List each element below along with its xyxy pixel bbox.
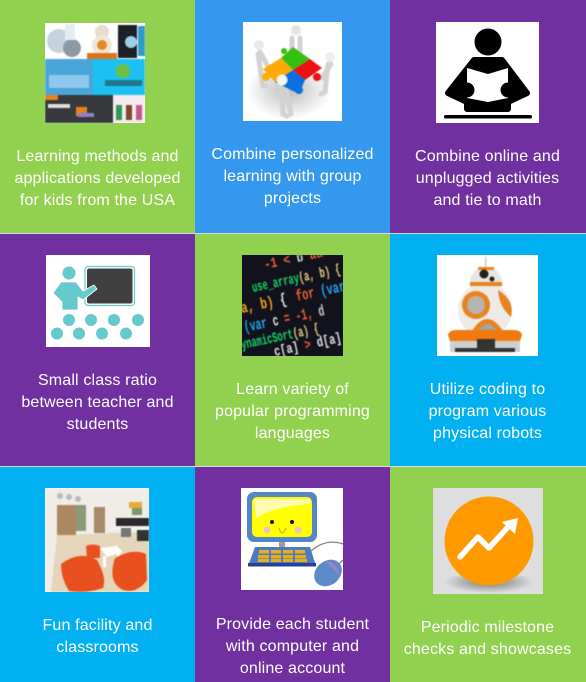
text: fun facility: classrooms — [56, 639, 139, 656]
icon: product collage — [45, 23, 145, 123]
text: small class ratio: Small class ratio — [38, 372, 157, 389]
text: physical robots: physical robots — [433, 425, 542, 442]
panel: small class ratio — [0, 234, 195, 466]
icon: code screen: (var c = -1, d — [242, 302, 326, 337]
text: personalized and group: projects — [264, 190, 321, 207]
text: USA learning methods: for kids from the USA — [20, 192, 175, 209]
panel: physical robots — [390, 234, 586, 466]
panel: milestones — [390, 467, 586, 682]
icon: person reading — [436, 22, 539, 123]
text: physical robots: Utilize coding to — [430, 381, 545, 398]
panel: personalized and group — [195, 0, 390, 233]
text: milestones: Periodic milestone — [421, 619, 554, 636]
text: programming languages: Learn variety of — [236, 381, 349, 398]
text: computer and account — [216, 616, 369, 677]
icon: code screen — [242, 255, 343, 356]
text: physical robots: program various — [429, 403, 546, 420]
text: online and unplugged: unplugged activities — [416, 170, 559, 187]
text: small class ratio: between teacher and — [21, 394, 174, 411]
text: small class ratio: students — [67, 416, 128, 433]
text: milestones — [404, 619, 571, 658]
panel: fun facility — [0, 467, 195, 682]
text: USA learning methods: applications developed — [14, 170, 181, 187]
text: personalized and group — [211, 146, 374, 207]
text: programming languages — [215, 381, 370, 442]
text: programming languages: languages — [255, 425, 330, 442]
text: computer and account: Provide each student — [216, 616, 369, 633]
panel: computer and account — [195, 467, 390, 682]
panel: online and unplugged — [390, 0, 586, 233]
text: small class ratio — [21, 372, 174, 433]
text: personalized and group: learning with group — [223, 168, 362, 185]
panel: programming languages — [195, 234, 390, 466]
text: computer and account: online account — [240, 660, 345, 677]
text: programming languages: popular programming — [215, 403, 370, 420]
text: fun facility: Fun facility and — [42, 617, 152, 634]
text: USA learning methods: Learning methods and — [16, 148, 179, 165]
icon: people with puzzle — [243, 22, 342, 121]
icon: classroom photo — [45, 488, 149, 592]
text: USA learning methods — [14, 148, 181, 209]
icon: code screen: use_array(a, b) { — [250, 262, 342, 297]
icon: smiling computer — [241, 488, 343, 590]
text: personalized and group: Combine personalized — [211, 146, 374, 163]
text: fun facility — [42, 617, 152, 656]
text: online and unplugged: and tie to math — [433, 192, 542, 209]
icon: growth arrow badge — [433, 488, 543, 594]
text: physical robots — [429, 381, 546, 442]
text: online and unplugged — [415, 148, 560, 209]
text: computer and account: with computer and — [226, 638, 359, 655]
text: milestones: checks and showcases — [404, 641, 571, 658]
icon: teacher and students — [46, 255, 150, 347]
icon: BB-8 robot — [437, 255, 538, 356]
panel: USA learning methods — [0, 0, 195, 233]
text: online and unplugged: Combine online and — [415, 148, 560, 165]
